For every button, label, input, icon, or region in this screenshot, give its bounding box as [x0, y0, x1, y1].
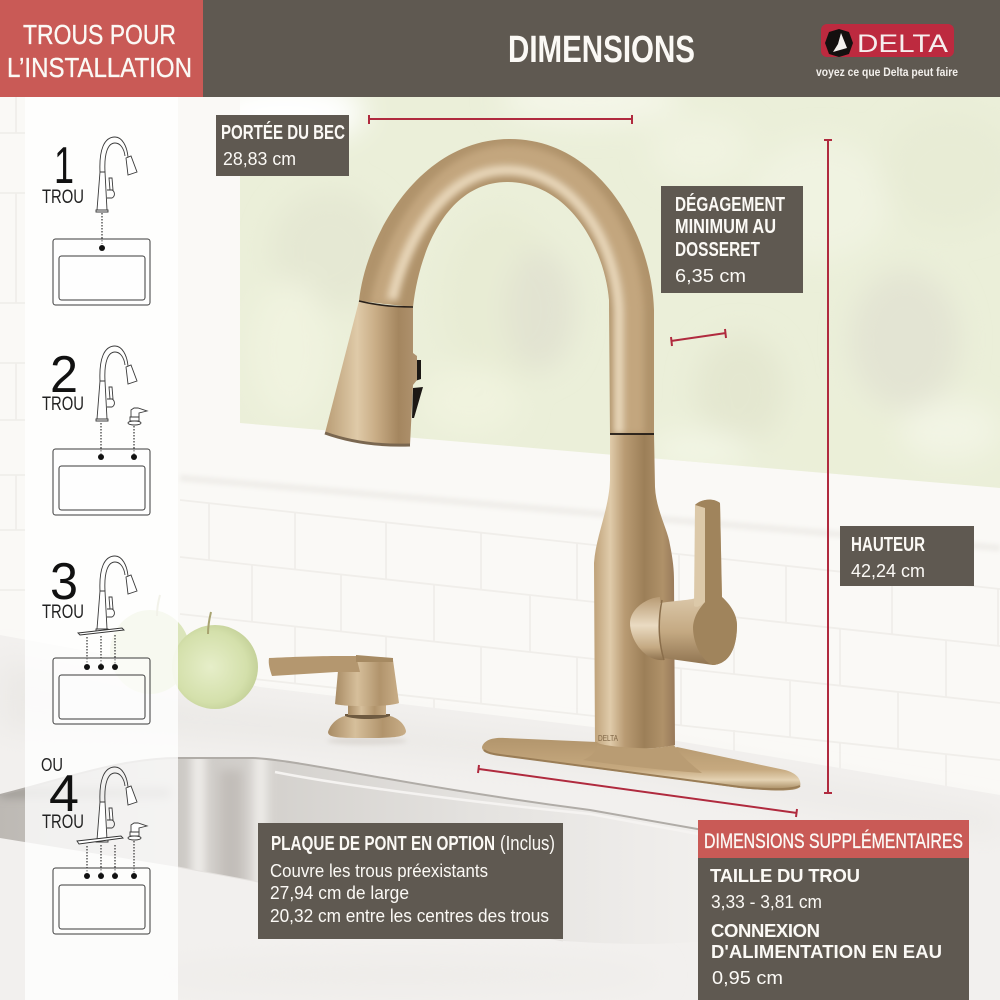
window sill shadow [180, 478, 1000, 548]
option 4 holes: 4 [49, 765, 79, 823]
callout: backsplash clearance [661, 186, 803, 293]
sink rim [0, 758, 720, 833]
faucet [325, 139, 800, 790]
panel: additional dimensions [698, 820, 969, 1000]
option 4 holes: OU [41, 755, 63, 775]
panel: additional dimensions: 0,95 cm [712, 968, 783, 988]
faucet lower body [594, 434, 675, 749]
option 1 hole: TROU [42, 187, 84, 208]
heading: trous pour l'installation: TROUS POUR [23, 19, 176, 50]
option 4 holes: TROU [42, 812, 84, 833]
callout: backsplash clearance: 6,35 cm [675, 266, 746, 286]
callout: backsplash clearance: DOSSERET [675, 239, 760, 261]
callout: spout reach [216, 115, 349, 176]
sink basin [0, 759, 584, 942]
deck plate [482, 738, 800, 790]
heading: dimensions: DIMENSIONS [508, 29, 695, 71]
dimension arrow: height [824, 140, 832, 793]
option 1 hole: 1 [54, 137, 74, 195]
callout: optional deck plate: 20,32 cm entre les centres des trous [270, 906, 549, 926]
logo: delta: DELTA [857, 30, 948, 58]
option 3 holes [42, 553, 150, 724]
panel: additional dimensions: D'ALIMENTATION EN EAU [711, 941, 942, 962]
icon: apples [110, 595, 258, 709]
soap dispenser [269, 655, 407, 745]
callout: height: 42,24 cm [851, 561, 925, 581]
tile grout [0, 97, 1000, 795]
window with blurred foliage [240, 97, 1000, 488]
option 2 holes: 2 [50, 346, 78, 404]
callout: backsplash clearance: MINIMUM AU [675, 216, 776, 238]
option 1 hole [42, 137, 150, 305]
option 3 holes: 3 [50, 553, 78, 611]
option 2 holes: TROU [42, 394, 84, 415]
callout: optional deck plate: (Inclus) [500, 833, 555, 855]
lever handle [630, 500, 737, 665]
dimension arrow: deck plate width [478, 765, 797, 817]
faucet arch spout [359, 139, 654, 434]
callout: optional deck plate: PLAQUE DE PONT EN OPTION [271, 833, 495, 855]
callout: spout reach: PORTÉE DU BEC [221, 121, 345, 144]
logo: delta: voyez ce que Delta peut faire [816, 67, 958, 79]
callout: height: HAUTEUR [851, 534, 925, 556]
panel: additional dimensions: CONNEXION [711, 920, 820, 941]
logo: delta [816, 24, 958, 79]
header bar [203, 0, 1000, 97]
option 2 holes [42, 346, 150, 515]
dimension arrow: backsplash clearance [671, 329, 726, 346]
callout: height [840, 526, 974, 586]
callout: spout reach: 28,83 cm [223, 149, 296, 169]
faucet lower body: DELTA [598, 734, 619, 743]
callout: optional deck plate: 27,94 cm de large [270, 883, 409, 903]
panel: additional dimensions: TAILLE DU TROU [710, 865, 860, 886]
option 3 holes: TROU [42, 602, 84, 623]
option 4 holes [41, 755, 150, 934]
dimension arrow: spout reach [369, 115, 632, 124]
panel: additional dimensions: 3,33 - 3,81 cm [711, 892, 822, 912]
heading: trous pour l'installation: L’INSTALLATION [7, 52, 192, 83]
spray head [325, 301, 423, 445]
callout: optional deck plate: Couvre les trous préexistants [270, 861, 488, 881]
callout: optional deck plate [258, 823, 563, 939]
countertop [0, 635, 1000, 1000]
heading: trous pour l'installation [0, 0, 203, 97]
panel: installation holes [25, 97, 178, 1000]
callout: backsplash clearance: DÉGAGEMENT [675, 193, 785, 216]
